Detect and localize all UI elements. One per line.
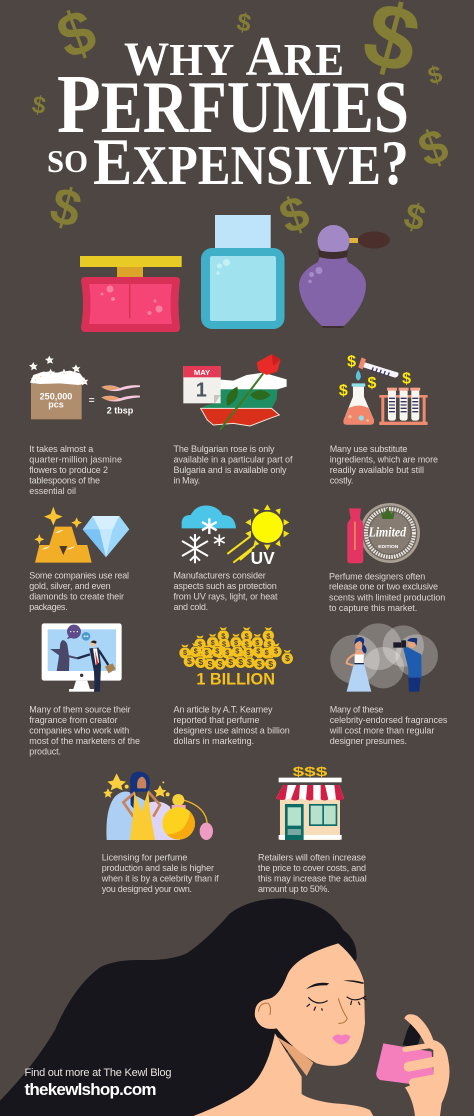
text: creator companies: companies who work with	[29, 725, 129, 735]
icon: lab flask and test tubes	[339, 354, 428, 425]
text: bulgarian rose: available in a particular part of	[174, 454, 293, 464]
text: substitute ingredients	[330, 444, 438, 486]
text: celebrity endorsed: will cost more than regular	[329, 725, 434, 735]
dollar signs background: $	[425, 61, 446, 90]
dollar signs background	[30, 0, 455, 245]
facial features	[307, 996, 367, 1011]
panel: bulgarian rose	[174, 354, 293, 486]
panel: licensing	[101, 772, 219, 894]
text: celebrity endorsed	[329, 704, 448, 746]
panel: substitute ingredients	[330, 354, 438, 486]
text: creator companies: Many of them source their	[29, 704, 131, 714]
text: protection: from UV rays, light, or heat	[174, 592, 278, 602]
icon: snow, sun and UV: UV	[251, 548, 275, 568]
text: bulgarian rose: Bulgaria and is available only	[174, 465, 287, 475]
hand	[404, 1014, 450, 1116]
icon: celebrity and photographer	[330, 623, 438, 692]
text: retailers: Retailers will often increase	[258, 852, 366, 862]
icon: calendar, map and rose: 1	[196, 380, 207, 402]
dollar signs background: $	[273, 186, 316, 245]
text: marketing spend: An article by A.T. Kearney	[174, 704, 273, 714]
icon: pink bottle	[80, 256, 182, 332]
icon: limited edition badge and bottle: Limited	[368, 526, 407, 541]
text: creator companies	[29, 704, 140, 756]
footer: call to action: thekewlshop.com	[24, 1080, 156, 1099]
dollar signs background: $	[235, 8, 253, 38]
text: protection: aspects such as protection	[174, 581, 277, 591]
text: protection: and cold.	[174, 602, 208, 612]
icon: money bags one billion	[179, 627, 293, 688]
text: limited edition: to capture this market.	[329, 603, 417, 613]
icon: limited edition badge and bottle: EDITION	[378, 544, 399, 550]
text: creator companies: most of the marketers of the	[29, 736, 140, 746]
text: celebrity endorsed: celebrity-endorsed fragrances	[330, 715, 448, 725]
icon: money bags one billion: $$$$$$$$$$$$$$$$$$$$	[183, 631, 278, 657]
title: SO	[47, 143, 88, 179]
text: bulgarian rose: in May.	[174, 476, 200, 486]
text: retailers: amount up to 50%.	[258, 884, 330, 894]
text: marketing spend: dollars in marketing.	[174, 736, 254, 746]
dollar signs background: $	[30, 91, 48, 120]
panel: creator companies	[29, 623, 140, 756]
icon: limited edition badge and bottle	[347, 503, 420, 563]
text: limited edition: release one or two exclusive	[329, 582, 438, 592]
perfume bottle	[403, 1022, 421, 1048]
text: retailers: the price to cover costs, and	[258, 863, 366, 873]
dollar signs background: $	[412, 119, 455, 178]
icon: monitor with handshake	[42, 623, 122, 692]
footer: call to action	[24, 1067, 172, 1099]
text: substitute ingredients: ingredients, which are more	[330, 454, 438, 464]
panel: jasmine	[29, 356, 140, 496]
icon: flower box with spoons: pcs	[48, 399, 64, 409]
icon: calendar, map and rose: MAY	[194, 368, 210, 377]
ear detail	[258, 1003, 271, 1015]
text: bulgarian rose: The Bulgarian rose is only	[174, 444, 275, 454]
title: PERFUMES	[57, 58, 409, 151]
text: retailers: this may increase the actual	[258, 873, 367, 883]
text: creator companies: fragrance from creator	[29, 715, 118, 725]
icon: blue bottle	[201, 215, 284, 329]
title	[47, 26, 409, 199]
neck shadow	[277, 1037, 313, 1076]
dollar signs background: $	[44, 176, 87, 240]
icon: flower box with spoons: 2 tbsp	[107, 406, 134, 416]
text: celebrity endorsed: Many of these	[330, 704, 383, 714]
icon: shop front: $$$	[293, 765, 327, 779]
title: EXPENSIVE?	[93, 125, 409, 199]
icon: calendar, map and rose	[183, 354, 287, 430]
icon: flower box with spoons: 250,000	[40, 392, 72, 402]
text: jasmine: tablespoons of the	[29, 476, 100, 486]
panel: limited edition	[329, 503, 445, 613]
text: marketing spend: reported that perfume	[174, 715, 260, 725]
icon: money bags one billion: 1 BILLION	[196, 669, 275, 688]
text: jasmine: It takes almost a	[29, 444, 93, 454]
text: licensing: production and sale is higher	[102, 863, 214, 873]
title: WHY ARE	[124, 26, 344, 88]
icon: celebrity with perfume and stars	[103, 772, 213, 840]
icon: lab flask and test tubes: $	[339, 382, 348, 399]
text: limited edition	[329, 571, 445, 613]
text: limited edition: Perfume designers often	[329, 571, 425, 581]
text: gold and diamonds: Some companies use real	[29, 571, 129, 581]
icon: flower box with spoons: =	[89, 396, 95, 407]
face	[255, 943, 365, 1066]
text: protection	[174, 571, 278, 612]
text: gold and diamonds: packages.	[29, 602, 68, 612]
text: jasmine	[29, 444, 122, 496]
text: marketing spend: designers use almost a billion	[174, 725, 290, 735]
illustration: woman smelling perfume	[0, 898, 450, 1116]
icon: flower box with spoons	[29, 356, 140, 419]
text: gold and diamonds	[29, 571, 129, 612]
text: licensing: you designed your own.	[102, 884, 192, 894]
text: licensing	[101, 852, 219, 894]
icon: lab flask and test tubes: $	[347, 354, 356, 371]
text: creator companies: product.	[29, 746, 61, 756]
text: substitute ingredients: readily available but still	[330, 465, 424, 475]
icon: money bags one billion: $$$$$$$$$$	[187, 653, 290, 669]
text: substitute ingredients: costly.	[330, 476, 353, 486]
text: jasmine: essential oil	[29, 486, 76, 496]
panel: gold and diamonds	[29, 507, 129, 612]
text: limited edition: scents with limited production	[329, 592, 445, 602]
panel: retailers	[258, 765, 367, 894]
text: retailers	[258, 852, 367, 894]
perfume bottles	[80, 215, 390, 332]
icon: purple atomizer bottle	[299, 225, 390, 328]
text: protection: Manufacturers consider	[174, 571, 266, 581]
text: bulgarian rose	[174, 444, 293, 486]
text: substitute ingredients: Many use substitute	[330, 444, 407, 454]
text: gold and diamonds: diamonds to create their	[29, 592, 124, 602]
icon: lab flask and test tubes: $	[368, 375, 377, 392]
text: gold and diamonds: gold, silver, and even	[29, 581, 111, 591]
hair	[0, 898, 357, 1116]
text: licensing: Licensing for perfume	[102, 852, 187, 862]
text: jasmine: quarter-million jasmine	[29, 454, 122, 464]
text: marketing spend	[174, 704, 290, 746]
icon: lab flask and test tubes: $	[402, 371, 411, 388]
neck and shoulders	[193, 1033, 373, 1116]
text: celebrity endorsed: designer presumes.	[330, 736, 407, 746]
icon: gold bars and diamond	[34, 507, 129, 563]
panel: protection	[174, 504, 289, 612]
dollar signs background: $	[400, 194, 430, 239]
text: licensing: when it is by a celebrity than if	[101, 873, 219, 883]
panel: marketing spend	[174, 627, 293, 746]
text: jasmine: flowers to produce 2	[29, 465, 108, 475]
panel: celebrity endorsed	[329, 623, 448, 746]
footer: call to action: Find out more at The Kewl Blog	[24, 1067, 172, 1079]
